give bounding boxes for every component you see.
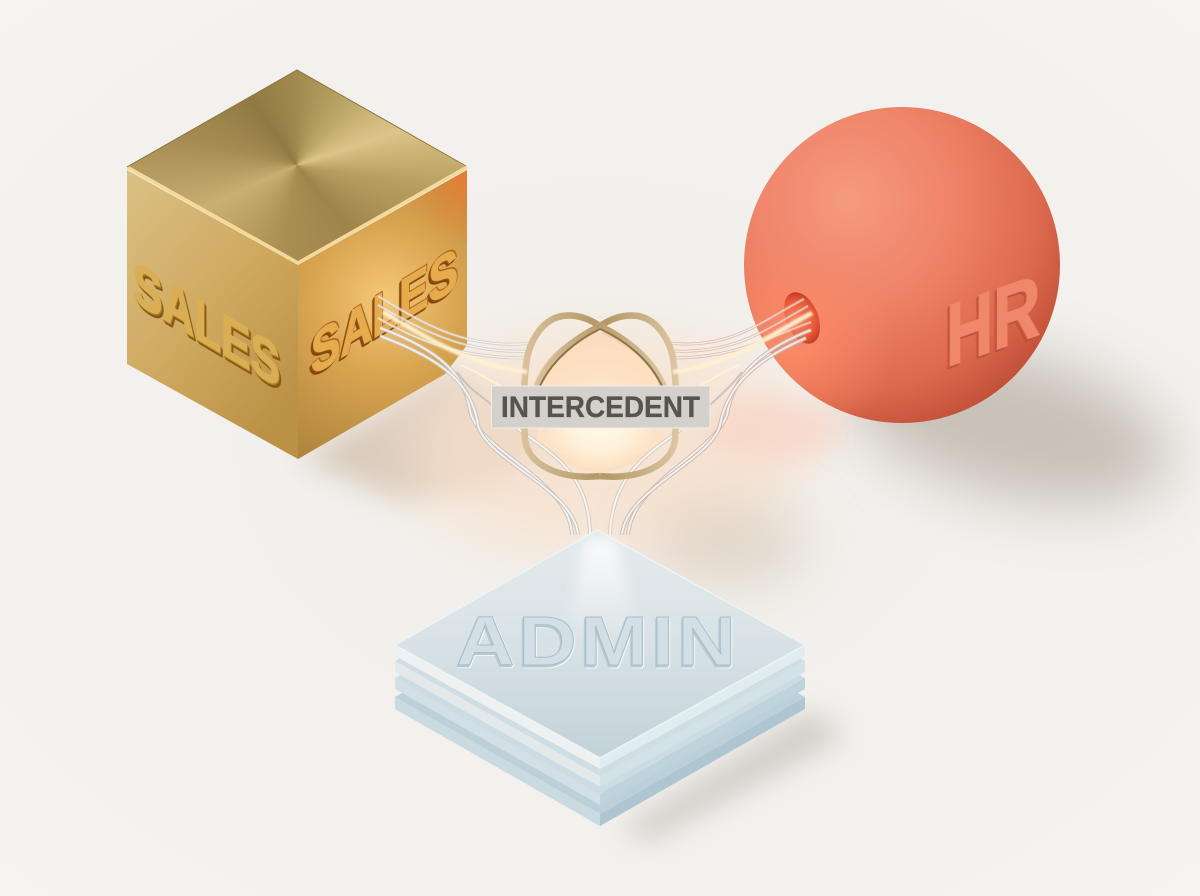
text: ADMIN: ADMIN xyxy=(456,602,740,681)
beam on plate xyxy=(565,540,640,640)
ring crossing arcs dark edge xyxy=(540,329,662,386)
beam: down xyxy=(598,440,602,530)
cube top face xyxy=(127,70,467,264)
sphere warm glow near port xyxy=(744,107,1060,423)
label plate xyxy=(492,386,710,428)
orb core glow xyxy=(556,393,644,457)
ring A xyxy=(537,315,677,477)
glow: sphere reflected light xyxy=(705,398,845,462)
cube front bevel xyxy=(127,167,467,263)
tube set: upper left xyxy=(378,296,535,358)
tube set: upper right xyxy=(668,299,811,358)
plate 1 xyxy=(395,530,805,769)
text: HR: HR xyxy=(946,256,1040,386)
label text: INTERCEDENT xyxy=(501,391,700,424)
ring B xyxy=(523,315,664,477)
cube right face hot corner xyxy=(298,170,467,459)
glow: intercedent warm light xyxy=(400,335,800,555)
shadow: orb on ground xyxy=(650,507,810,583)
plate 4 xyxy=(395,584,805,826)
beam: right side branch xyxy=(698,365,740,386)
cube right face xyxy=(298,170,467,459)
label: intercedent xyxy=(492,386,710,428)
orb inner glow xyxy=(537,332,665,459)
shadow: sphere xyxy=(832,315,1188,535)
tube set: lower right xyxy=(610,330,811,535)
beam: right xyxy=(673,313,812,372)
plate 3 xyxy=(395,564,805,805)
coral sphere: hr xyxy=(744,107,1060,423)
text: SALES left face: SALES xyxy=(133,248,280,401)
beam: left xyxy=(383,312,527,372)
gold cube: sales xyxy=(127,70,467,459)
cube back edge xyxy=(127,70,466,167)
orb xyxy=(530,332,668,472)
shadow: cube xyxy=(298,372,560,500)
sphere port xyxy=(777,287,827,349)
plate 2 xyxy=(395,547,805,787)
intercedent hub xyxy=(378,296,812,535)
glass plates: admin xyxy=(395,530,805,826)
cube left face xyxy=(127,170,298,459)
shadow: plates xyxy=(620,712,845,840)
sphere body xyxy=(744,107,1060,423)
ground shadows xyxy=(298,315,1188,840)
text: SALES right face: SALES xyxy=(311,234,458,389)
beam: left side branch xyxy=(460,365,502,386)
tube set: lower left xyxy=(380,328,590,535)
